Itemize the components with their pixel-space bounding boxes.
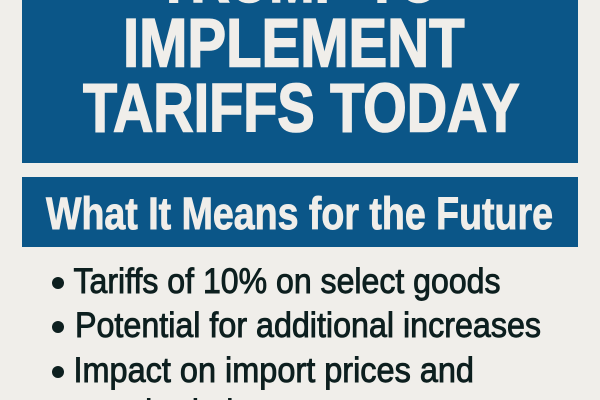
bullet: potential increases: Potential for additional increases [75, 306, 541, 345]
bullet: impact on prices: Impact on import prices and [74, 351, 474, 390]
bullet list [52, 262, 541, 400]
title: headline [83, 0, 520, 146]
panel: subheading banner [22, 177, 578, 247]
title: headline: IMPLEMENT [123, 4, 464, 82]
panel: headline banner [22, 0, 578, 163]
bullet: tariffs of 10%: Tariffs of 10% on select goods [74, 262, 500, 301]
